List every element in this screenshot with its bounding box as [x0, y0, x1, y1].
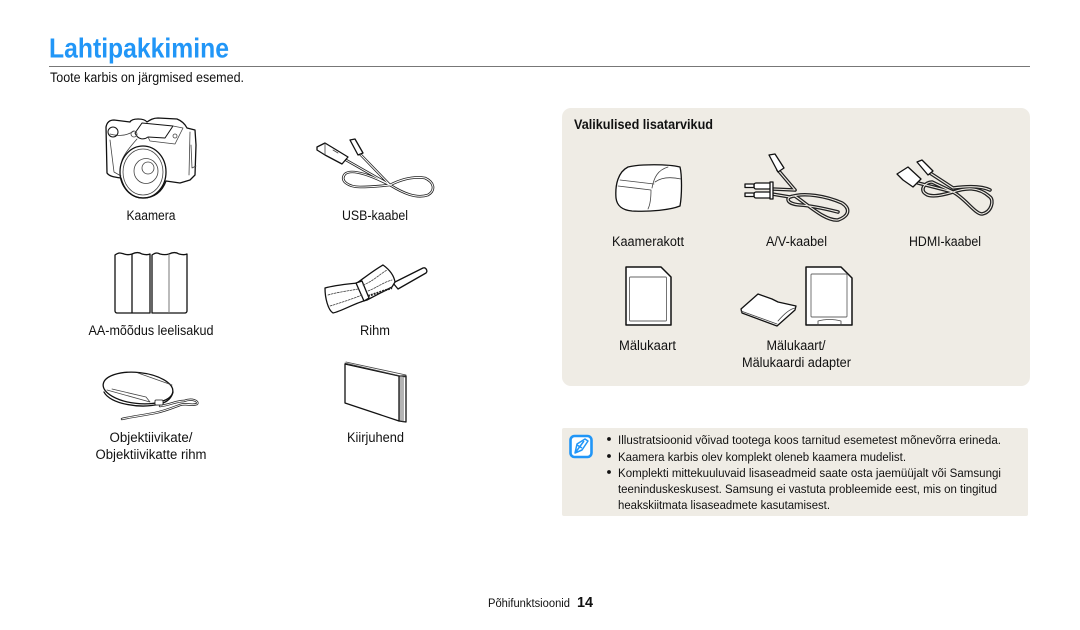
icon: booklet: [345, 362, 406, 422]
item: memory card adapter: [741, 267, 852, 370]
item: lens cap: [96, 369, 206, 462]
note bullets: [607, 433, 1001, 512]
label: Kiirjuhend: [347, 430, 404, 445]
item: camera bag: [612, 165, 684, 249]
item: batteries: [88, 252, 214, 338]
icon: SD card: [626, 267, 671, 325]
label: Kaamera: [126, 208, 176, 223]
icon: camera bag: [616, 165, 682, 211]
item: USB cable: [317, 139, 433, 223]
item: guide: [345, 362, 406, 445]
footer: section name and page number: [488, 595, 593, 611]
icon: camera: [106, 118, 196, 198]
icon: AA batteries: [115, 252, 187, 313]
icon: USB cable: [317, 139, 433, 196]
footer: section name and page number: Põhifunktsioonid: [488, 598, 570, 610]
label: Kaamerakott: [612, 234, 684, 249]
icon: lens cap: [102, 369, 197, 419]
note box: [562, 428, 1028, 516]
panel: optional accessories: [562, 108, 1030, 386]
note bullets: Kaamera karbis olev komplekt oleneb kaamera mudelist.: [618, 450, 906, 464]
item: HDMI cable: [897, 160, 992, 249]
label: [96, 430, 206, 462]
icon: SD adapter: [806, 267, 852, 325]
note bullets: Illustratsioonid võivad tootega koos tarnitud esemetest mõnevõrra erineda.: [618, 433, 1001, 447]
note bullets: Komplekti mittekuuluvaid lisaseadmeid saate osta jaemüüjalt või Samsungi: [618, 466, 1001, 480]
label: AA-mõõdus leelisakud: [88, 323, 214, 338]
label: Mälukaardi adapter: [742, 355, 851, 370]
note bullets: heakskiitmata lisaseadmete kasutamisest.: [618, 498, 830, 512]
item: camera: [106, 118, 196, 223]
label: Objektiivikatte rihm: [96, 447, 206, 462]
panel heading: Valikulised lisatarvikud: [574, 117, 713, 132]
label: [742, 338, 851, 370]
label: Mälukaart/: [766, 338, 826, 353]
footer: section name and page number: 14: [577, 595, 593, 611]
label: A/V-kaabel: [766, 234, 827, 249]
item: strap: [325, 265, 427, 338]
icon: microSD: [741, 294, 796, 326]
label: HDMI-kaabel: [909, 234, 981, 249]
icon: HDMI cable: [897, 160, 992, 214]
item: AV cable: [745, 154, 848, 249]
icon: note pencil: [570, 436, 592, 457]
label: Rihm: [360, 323, 390, 338]
icon: AV cable: [745, 154, 848, 220]
label: USB-kaabel: [342, 208, 408, 223]
icon: strap: [325, 265, 427, 313]
title: Lahtipakkimine: [49, 32, 229, 64]
note bullets: teeninduskeskusest. Samsung ei vastuta probleemide eest, mis on tingitud: [618, 482, 997, 496]
intro text: Toote karbis on järgmised esemed.: [50, 70, 244, 85]
item: memory card: [619, 267, 676, 353]
label: Mälukaart: [619, 338, 676, 353]
label: Objektiivikate/: [110, 430, 193, 445]
